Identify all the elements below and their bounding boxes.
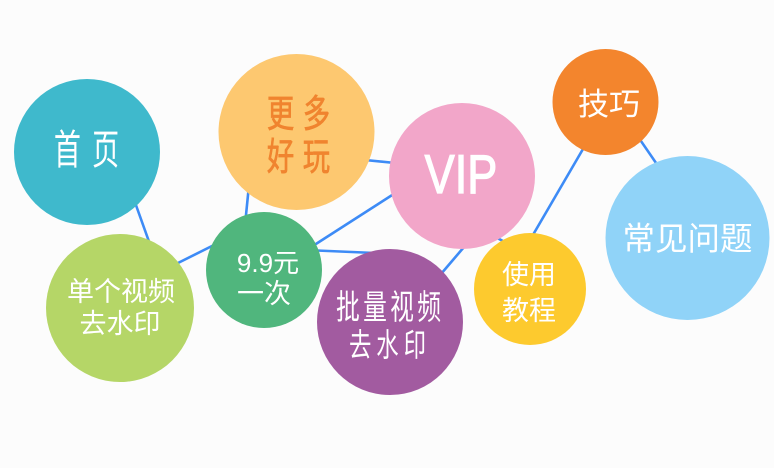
connecting lines [132,128,665,281]
bubble: 更多好玩: 好玩 [267,137,330,179]
bubble: 常见问题 [606,156,770,320]
bubble: 使用教程: 使用 [502,260,556,290]
bubble: 批量视频去水印: 批量视频 [336,289,441,327]
bubble: VIP: VIP [425,143,497,205]
bubble: 技巧 [552,49,658,155]
bubble: 更多好玩 [218,54,374,210]
bubble: 技巧: 技巧 [578,87,640,122]
bubble: 使用教程 [474,233,586,345]
bubble: VIP [389,103,535,249]
bubble: 9.9元一次: 一次 [237,279,291,309]
bubble: 使用教程: 教程 [502,296,556,326]
bubble: 常见问题: 常见问题 [622,221,753,257]
bubble: 单个视频去水印: 去水印 [80,309,160,339]
bubble: 批量视频去水印 [317,249,463,395]
bubble: 更多好玩: 更多 [267,94,330,136]
bubble: 单个视频去水印: 单个视频 [67,277,175,307]
bubble: 9.9元一次: 9.9元 [237,248,299,278]
bubble: 单个视频去水印 [46,234,194,382]
bubble: 9.9元一次 [206,212,322,328]
bubble: 批量视频去水印: 去水印 [349,327,426,363]
bubble: 首页: 首页 [54,127,119,173]
bubble: 首页 [14,79,160,225]
